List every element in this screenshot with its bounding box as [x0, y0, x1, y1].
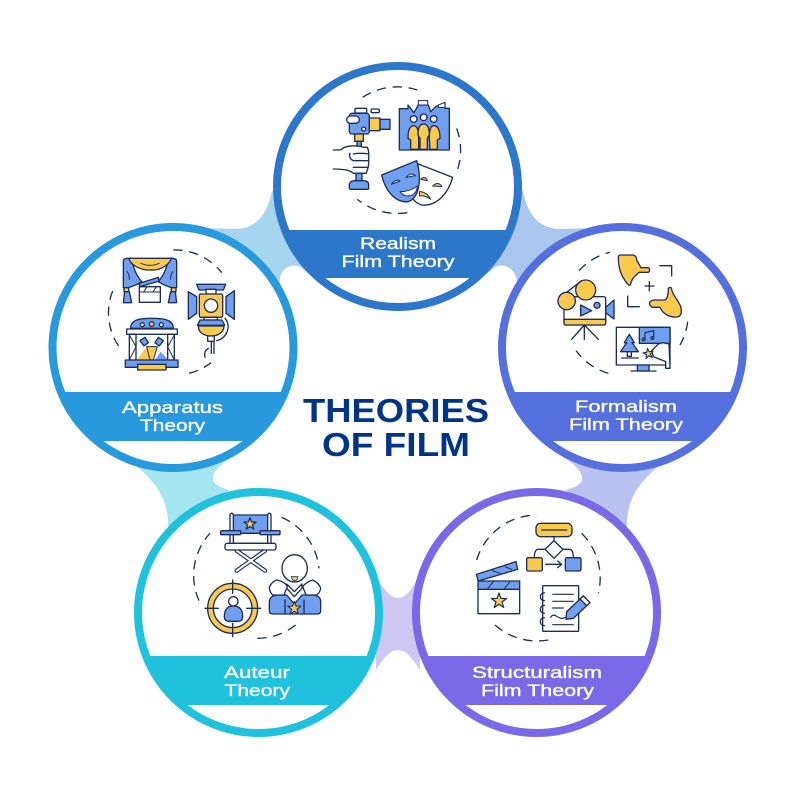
icon: stage curtain, spotlight and stage	[108, 250, 234, 373]
connector: formalism to structuralism	[560, 440, 660, 530]
panel: auteur theory	[130, 492, 390, 733]
icon: director chair, target and star person	[194, 513, 321, 638]
icon: flowchart, clapperboard and notebook	[476, 515, 600, 641]
panel: realism film theory: Film Theory	[342, 252, 455, 271]
panel: apparatus theory: Apparatus	[122, 398, 223, 417]
panel: structuralism film theory	[405, 492, 665, 733]
panel: auteur theory: Auteur	[224, 663, 290, 682]
connector: realism to formalism	[485, 190, 600, 285]
panel: apparatus theory	[40, 227, 300, 468]
panel: formalism film theory: Formalism	[575, 397, 677, 416]
connector: auteur to structuralism	[375, 575, 420, 670]
panel: formalism film theory: Film Theory	[569, 415, 684, 434]
connector: apparatus to auteur	[135, 440, 235, 530]
panel: formalism film theory	[495, 227, 755, 468]
icon: film camera, framing hands and editing monitor	[558, 252, 688, 373]
panel: structuralism film theory: Structuralism	[472, 663, 602, 682]
connector: realism to apparatus	[205, 190, 310, 285]
title	[303, 392, 489, 463]
panel: apparatus theory: Theory	[140, 416, 206, 435]
title: OF FILM	[322, 426, 470, 463]
panel: auteur theory: Theory	[224, 681, 291, 700]
panel: structuralism film theory: Film Theory	[481, 681, 595, 700]
title: THEORIES	[303, 392, 489, 429]
icon: camera, crowd and masks	[333, 87, 461, 213]
panel: realism film theory	[270, 66, 530, 307]
panel: realism film theory: Realism	[360, 234, 436, 253]
